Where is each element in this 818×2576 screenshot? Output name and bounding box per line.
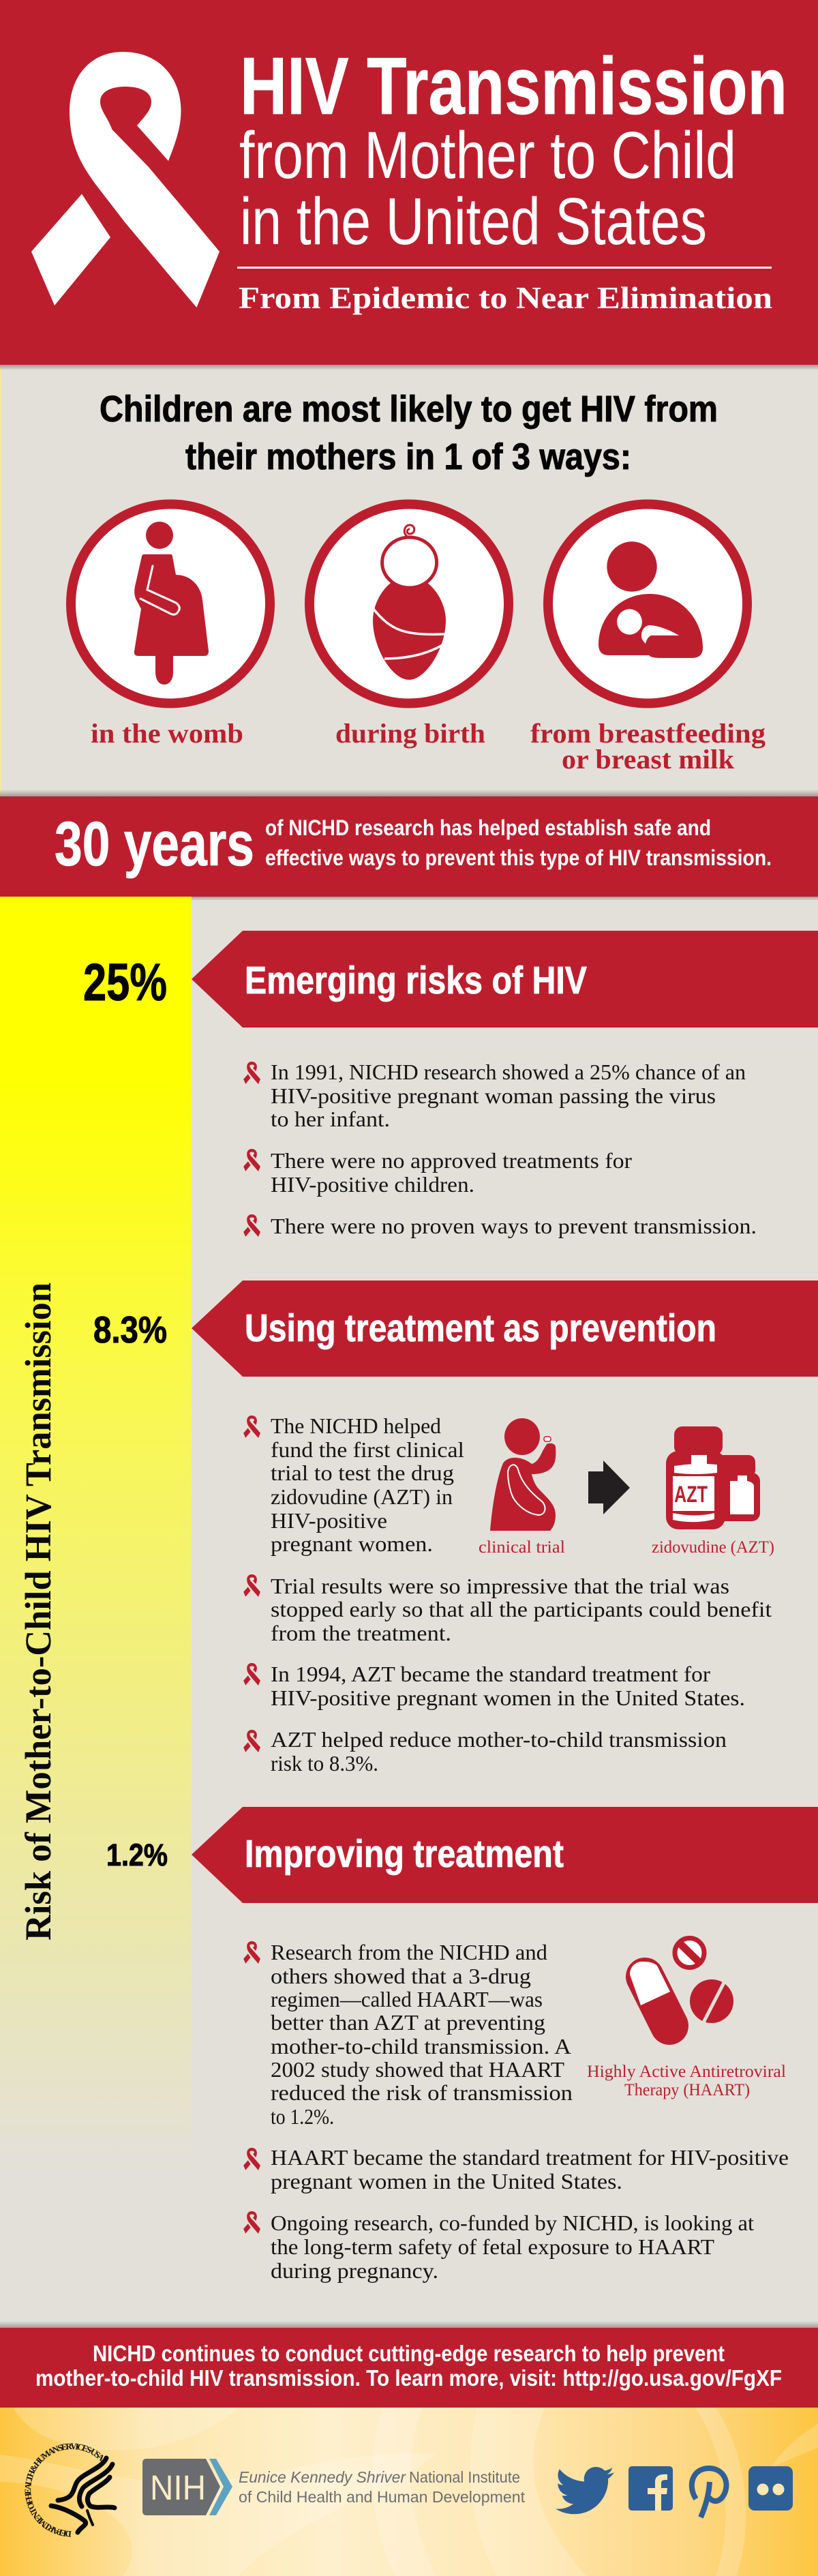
bullet 2: stopped early so that all the participants could benefit — [271, 1597, 772, 1621]
bullet 1: 2002 study showed that HAART — [271, 2057, 564, 2082]
bullet 2: pregnant women in the United States. — [271, 2169, 622, 2193]
stat: 30 years: 30 years — [55, 809, 254, 879]
bullet 1: Research from the NICHD and — [271, 1940, 547, 1964]
icon: Twitter — [556, 2467, 614, 2514]
bullet 2: Trial results were so impressive that the trial was — [271, 1574, 729, 1598]
institute name — [239, 2468, 526, 2506]
section heading: Using treatment as prevention — [245, 1306, 716, 1350]
section: treatment as prevention — [93, 1280, 818, 1776]
bullet 4 — [243, 1727, 727, 1776]
bullet 3: the long-term safety of fetal exposure to HAART — [271, 2234, 714, 2259]
risk gradient bar — [0, 897, 192, 2328]
section: emerging risks — [83, 931, 818, 1238]
arrow banner — [192, 931, 818, 1028]
bullet 3: HIV-positive pregnant women in the United States. — [271, 1686, 745, 1710]
arrow banner — [192, 1807, 818, 1903]
subtitle: From Epidemic to Near Elimination — [239, 281, 772, 315]
bullet 2 — [243, 1148, 632, 1197]
risk value 1.2%: 1.2% — [106, 1838, 168, 1872]
axis label: Risk of Mother-to-Child HIV Transmission — [18, 1283, 59, 1941]
logo: HHS seal: DEPARTMENT OF HEALTH & HUMAN SERVICES·USA — [25, 2443, 104, 2537]
intro heading: their mothers in 1 of 3 ways: — [185, 436, 631, 477]
band text: of NICHD research has helped establish safe and — [265, 815, 711, 840]
icon: mother nursing baby — [548, 505, 747, 704]
icon: HAART pills — [630, 1938, 733, 2026]
label: during birth: during birth — [335, 718, 485, 749]
bullet 3: during pregnancy. — [271, 2258, 438, 2283]
bullet 3: Ongoing research, co-funded by NICHD, is looking at — [271, 2211, 754, 2235]
way 1: in the womb — [71, 505, 270, 749]
label: from breastfeeding or breast milk — [530, 718, 766, 775]
institute name: National Institute — [409, 2468, 520, 2486]
bullet 1: The NICHD helped — [271, 1413, 441, 1438]
label: in the womb: in the womb — [91, 718, 243, 749]
bullet 1 — [243, 1060, 746, 1131]
title — [239, 41, 787, 258]
bullet 1: HIV-positive pregnant woman passing the virus — [271, 1083, 716, 1108]
footer panel — [0, 2408, 818, 2576]
arrow — [588, 1461, 630, 1514]
icon: clinical trial participant — [490, 1418, 556, 1531]
bullet 2: HIV-positive children. — [271, 1172, 474, 1197]
icon: Flickr — [748, 2466, 793, 2511]
bullet 1: zidovudine (AZT) in — [271, 1484, 453, 1509]
logo: NIH — [142, 2459, 232, 2515]
bullet 1: fund the first clinical — [271, 1437, 464, 1462]
bullet 1: trial to test the drug — [271, 1461, 454, 1485]
bullet 1: others showed that a 3-drug — [271, 1964, 531, 1988]
bullet 2: There were no approved treatments for — [271, 1148, 632, 1173]
bullet 3 — [243, 1662, 745, 1710]
bullet 1: HIV-positive — [271, 1508, 387, 1533]
bullet 1: to 1.2%. — [271, 2104, 334, 2129]
call to action text — [35, 2341, 782, 2391]
icon: pregnant woman — [71, 505, 270, 704]
icon: Facebook — [628, 2466, 673, 2511]
bullet 2 — [243, 2145, 789, 2193]
label: zidovudine: zidovudine (AZT) — [652, 1538, 774, 1557]
bullet 4: AZT helped reduce mother-to-child transmission — [271, 1727, 727, 1752]
icon: Pinterest — [692, 2468, 727, 2517]
band text — [265, 815, 772, 870]
bullet 2: HAART became the standard treatment for HIV-positive — [271, 2145, 789, 2170]
label: HAART: Highly Active Antiretroviral — [587, 2063, 786, 2081]
bullet 1: reduced the risk of transmission — [271, 2080, 573, 2105]
icon: awareness ribbon — [31, 52, 219, 308]
icon: AZT bottles: AZT — [674, 1482, 708, 1508]
label: from breastfeeding or breast milk: from breastfeeding — [530, 718, 766, 749]
arrow banner — [192, 1280, 818, 1377]
band: 30 years of research — [0, 790, 818, 901]
bullet 2: from the treatment. — [271, 1621, 451, 1645]
way 3: breastfeeding — [530, 505, 766, 775]
icon: swaddled baby — [309, 505, 509, 704]
section heading: Improving treatment — [245, 1832, 564, 1876]
risk value 25%: 25% — [83, 953, 167, 1012]
intro heading — [100, 389, 718, 477]
bullet 2 — [243, 1574, 772, 1645]
bullet 1: In 1991, NICHD research showed a 25% chance of an — [271, 1060, 746, 1084]
label: HAART: Therapy (HAART) — [624, 2081, 750, 2099]
section: improving treatment — [106, 1807, 818, 2283]
bullet 1: to her infant. — [271, 1107, 390, 1131]
call to action band — [0, 2321, 818, 2408]
call to action text: NICHD continues to conduct cutting-edge research to help prevent — [93, 2341, 725, 2366]
institute name: of Child Health and Human Development — [239, 2488, 526, 2506]
bullet 1: pregnant women. — [271, 1531, 433, 1556]
bullet 1: better than AZT at preventing — [271, 2010, 545, 2035]
label: clinical trial: clinical trial — [479, 1538, 565, 1557]
risk value 8.3%: 8.3% — [93, 1308, 167, 1351]
label: HAART — [587, 2063, 786, 2099]
bullet 3 — [243, 2211, 754, 2283]
bullet 1: regimen—called HAART—was — [271, 1987, 543, 2011]
bullet 1 — [243, 1940, 573, 2129]
header panel — [0, 0, 818, 370]
bullet 3: In 1994, AZT became the standard treatment for — [271, 1662, 710, 1686]
title: in the United States — [240, 184, 707, 258]
icon: AZT bottles — [666, 1426, 760, 1529]
section heading: Emerging risks of HIV — [245, 959, 587, 1002]
intro heading: Children are most likely to get HIV from — [100, 389, 718, 430]
way 2: during birth — [309, 505, 509, 749]
logo: NIH: NIH — [150, 2468, 206, 2507]
bullet 1 — [243, 1413, 464, 1556]
bullet 3: There were no proven ways to prevent transmission. — [271, 1214, 757, 1238]
label: from breastfeeding or breast milk: or breast milk — [562, 744, 735, 775]
bullet 1: mother-to-child transmission. A — [271, 2034, 571, 2058]
institute name: Eunice Kennedy Shriver — [239, 2468, 406, 2486]
bullet 4: risk to 8.3%. — [271, 1751, 378, 1776]
